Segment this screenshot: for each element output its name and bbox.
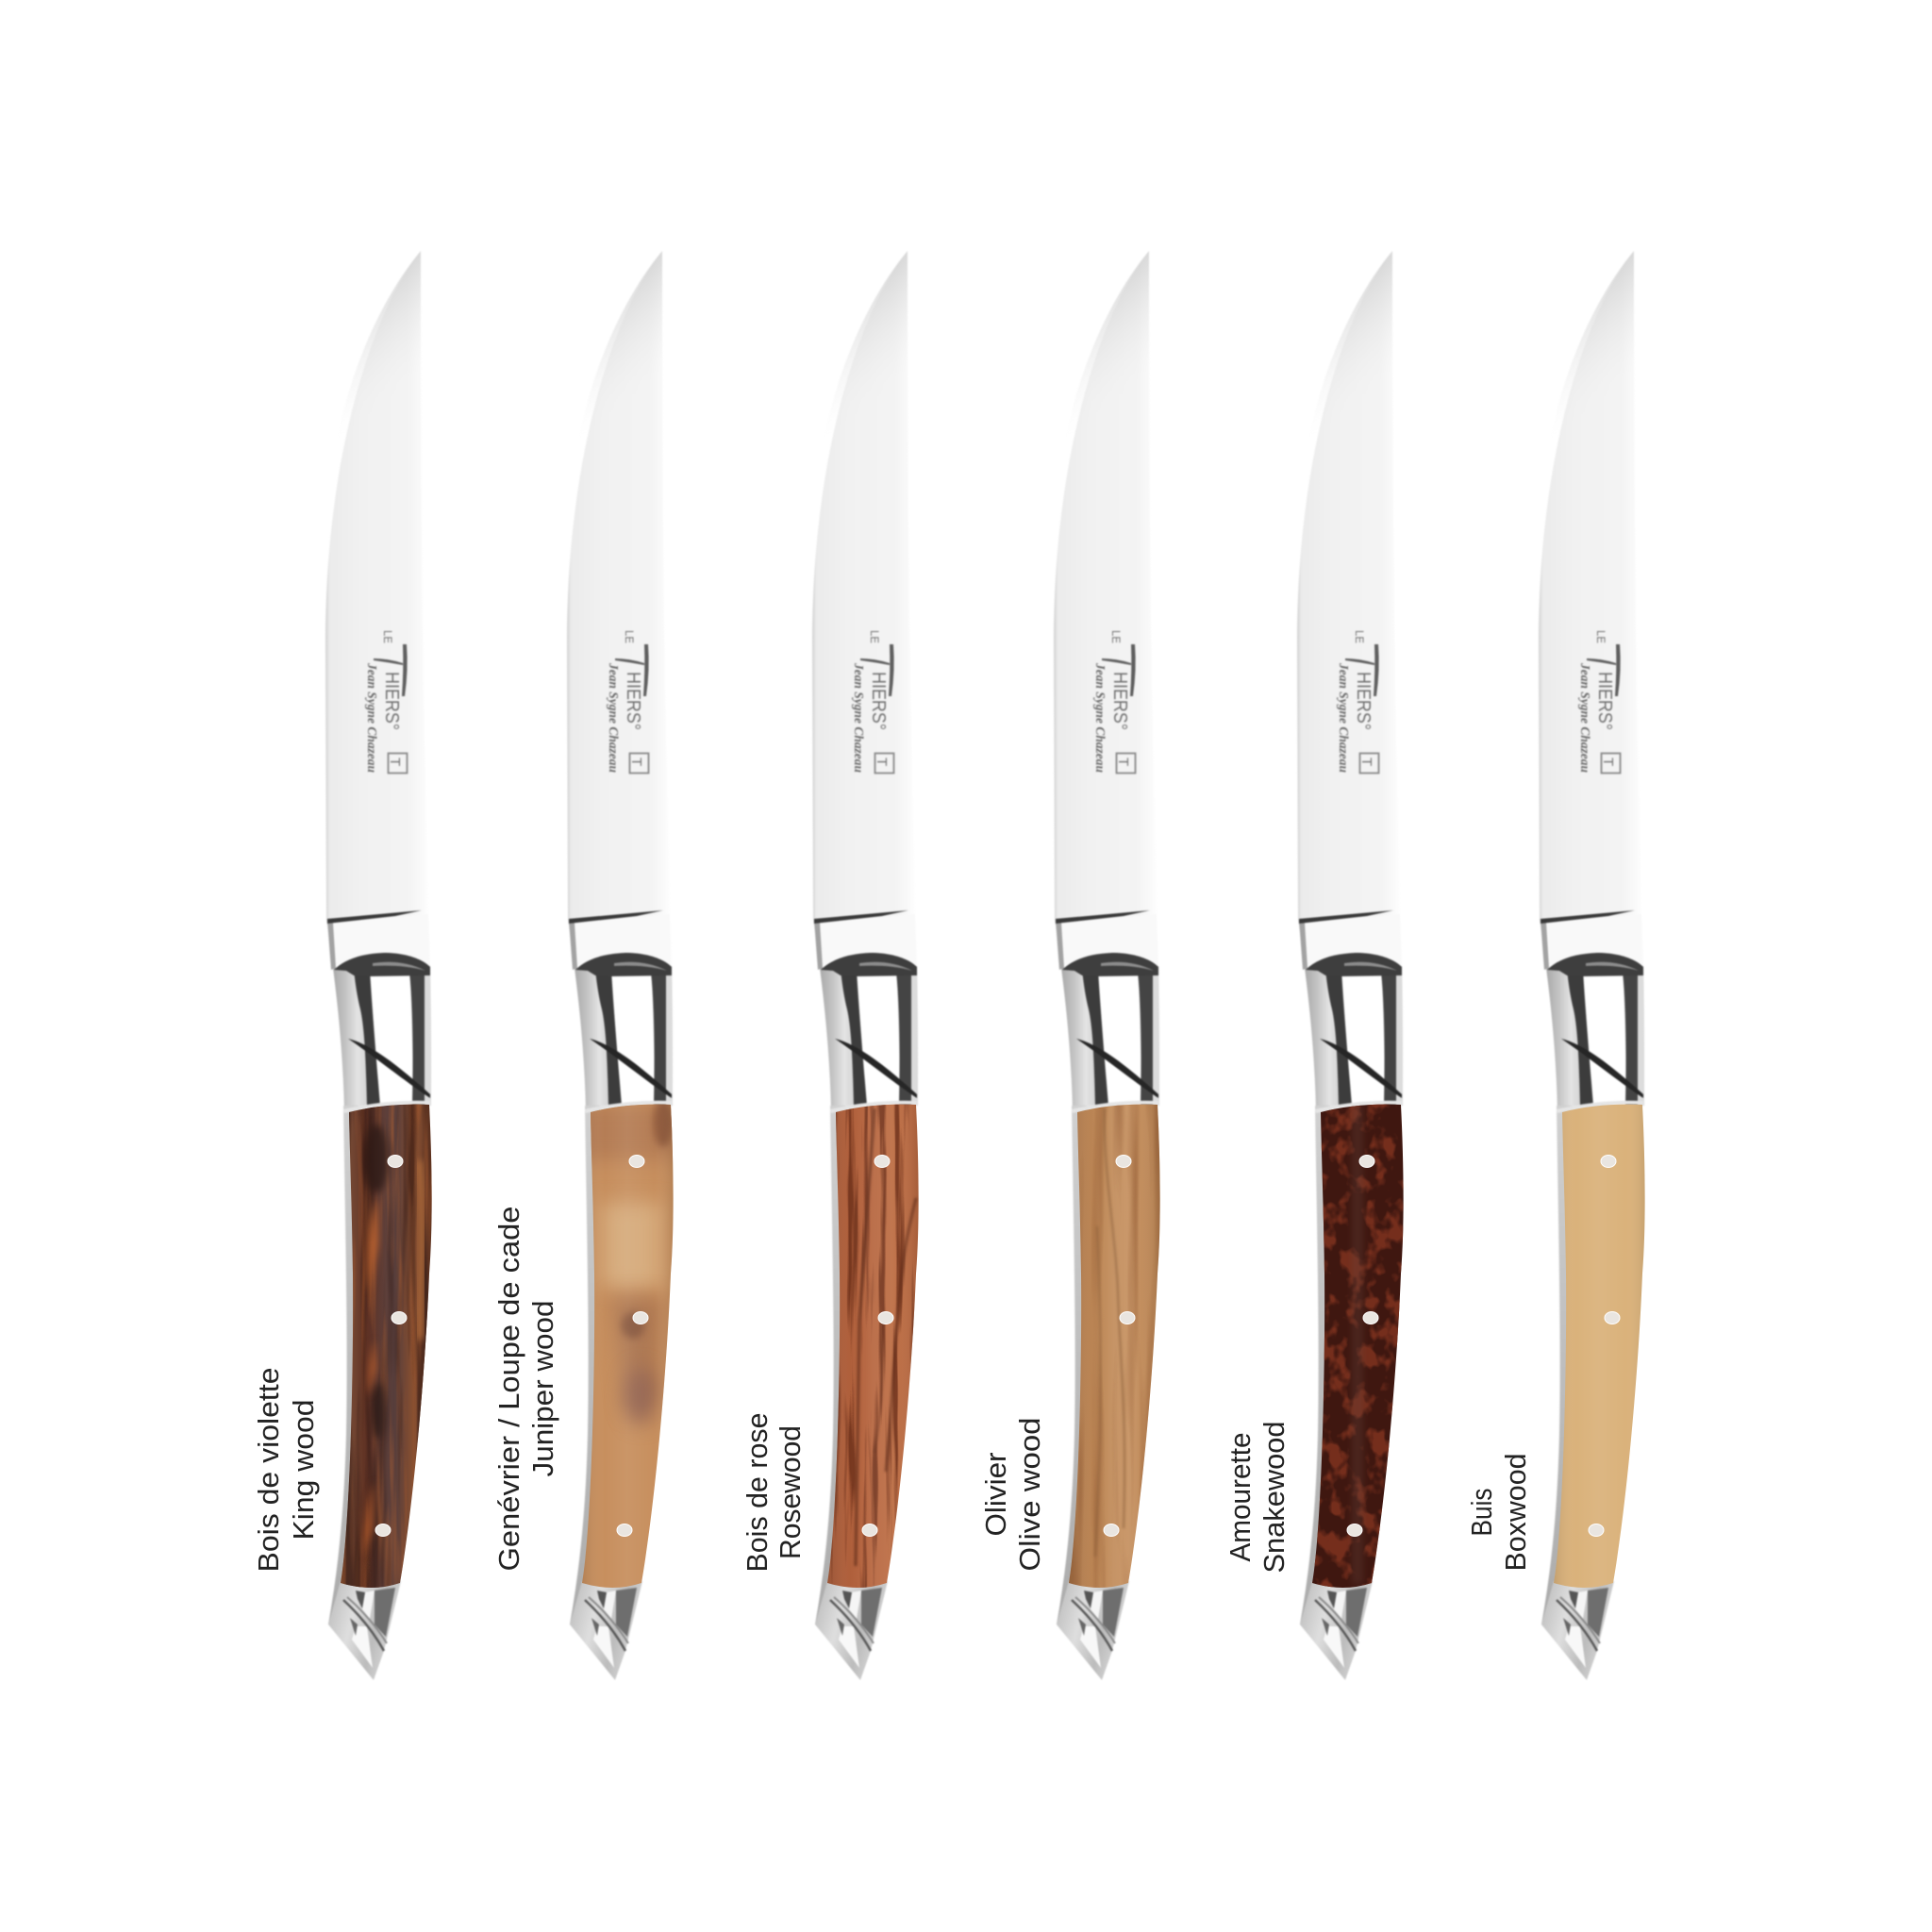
label: boxwood bbox=[1465, 1453, 1532, 1572]
label: boxwood: Buis bbox=[1465, 1489, 1498, 1536]
knife 3: rosewood bbox=[812, 251, 924, 1680]
label: olive wood bbox=[979, 1417, 1046, 1572]
label: snakewood: Snakewood bbox=[1257, 1421, 1291, 1574]
knife 4: olive wood bbox=[1054, 251, 1166, 1680]
label: king wood: Bois de violette bbox=[252, 1367, 285, 1573]
label: boxwood: Boxwood bbox=[1499, 1453, 1532, 1572]
label: olive wood: Olivier bbox=[979, 1453, 1012, 1536]
label: juniper wood: Juniper wood bbox=[526, 1300, 559, 1477]
label: snakewood: Amourette bbox=[1224, 1432, 1257, 1562]
label: rosewood bbox=[741, 1413, 807, 1572]
label: rosewood: Bois de rose bbox=[741, 1413, 774, 1572]
knife 1: king wood bbox=[325, 251, 438, 1680]
knife 2: juniper wood bbox=[567, 251, 679, 1680]
label: king wood: King wood bbox=[287, 1400, 320, 1540]
label: snakewood bbox=[1224, 1421, 1291, 1574]
label: juniper wood bbox=[492, 1206, 559, 1572]
label: juniper wood: Genévrier / Loupe de cade bbox=[492, 1206, 525, 1572]
label: rosewood: Rosewood bbox=[774, 1425, 807, 1559]
label: olive wood: Olive wood bbox=[1013, 1417, 1046, 1572]
knife 5: snakewood bbox=[1297, 251, 1409, 1680]
label: king wood bbox=[252, 1368, 320, 1572]
knife 6: boxwood bbox=[1539, 251, 1651, 1680]
